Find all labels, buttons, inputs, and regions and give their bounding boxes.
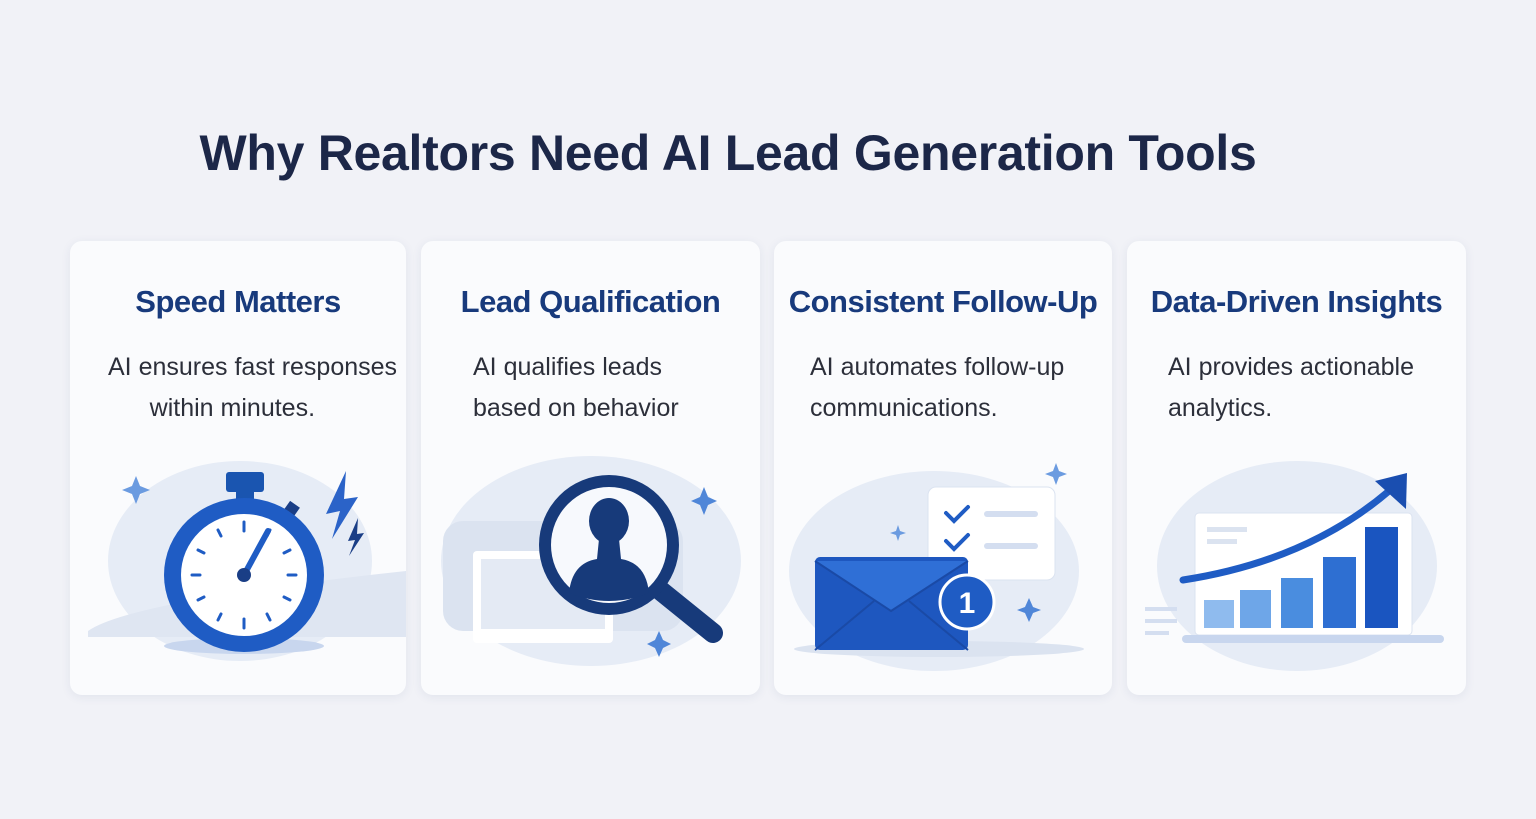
panel: speed matters [70,241,406,695]
text: follow-up: AI automates follow-up [810,353,1064,381]
icon: envelope and checklist [789,463,1084,671]
icon: bar chart with arrow [1145,461,1444,671]
text: qualification: AI qualifies leads [473,353,662,381]
text: follow-up [810,353,1064,422]
text: insights: analytics. [1168,394,1272,422]
text: qualification: based on behavior [473,394,679,422]
icon: envelope and checklist: 1 [959,587,975,620]
text: qualification [473,353,679,422]
text: insights: AI provides actionable [1168,353,1414,381]
heading: speed matters: Speed Matters [135,284,341,319]
icon: magnifier with person [441,456,741,666]
text: speed [108,353,397,422]
text: follow-up: communications. [810,394,998,422]
title: Why Realtors Need AI Lead Generation Tools [199,125,1257,181]
text: insights [1168,353,1414,422]
text: speed: within minutes. [150,394,315,422]
heading: follow-up: Consistent Follow-Up [789,284,1097,319]
panel: data-driven insights [1127,241,1466,695]
heading: insights: Data-Driven Insights [1151,284,1442,319]
heading: lead qualification: Lead Qualification [461,284,720,319]
panel: lead qualification [421,241,760,695]
icon: stopwatch [88,461,406,661]
panel: consistent follow-up [774,241,1112,695]
text: speed: AI ensures fast responses [108,353,397,381]
